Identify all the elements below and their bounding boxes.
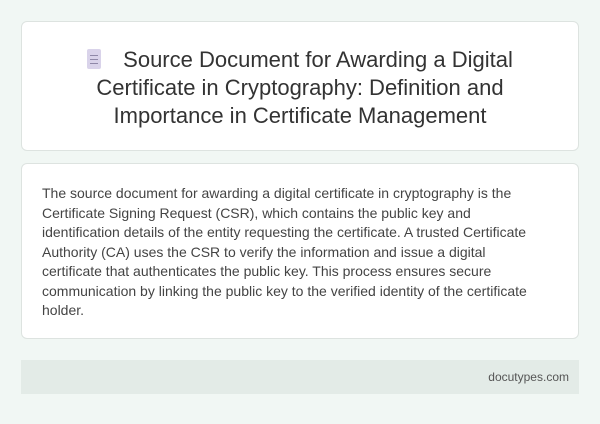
title: Source Document for Awarding a Digital Certificate in Cryptography: Definition and Importance in Certificate Management <box>96 47 513 128</box>
description text: The source document for awarding a digital certificate in cryptography is the Certificate Signing Request (CSR), which contains the public key and identification details of the entity requesting the certificate. A trusted Certificate Authority (CA) uses the CSR to verify the information and issue a digital certificate that authenticates the public key. This process ensures secure communication by linking the public key to the verified identity of the certificate holder. <box>42 185 527 318</box>
description panel <box>21 163 579 339</box>
title panel <box>21 21 579 151</box>
footer text: docutypes.com <box>488 370 569 384</box>
footer <box>21 360 579 394</box>
icon: document <box>87 49 101 69</box>
